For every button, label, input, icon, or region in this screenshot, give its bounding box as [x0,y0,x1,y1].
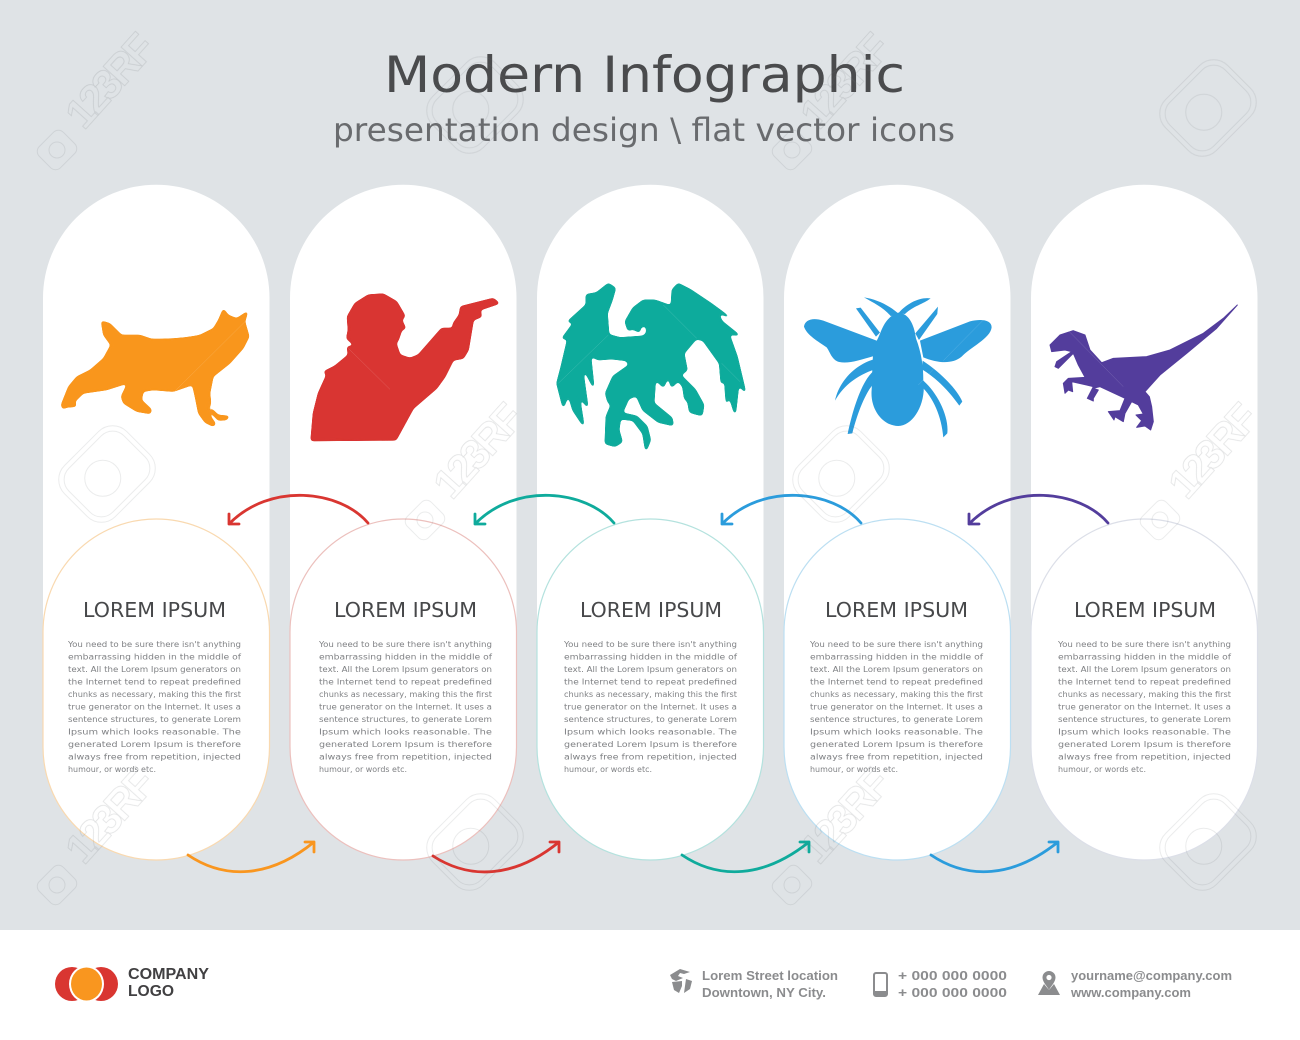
icon: map pin [1038,971,1060,995]
body text: humour, or words etc. [68,765,156,774]
body text: generated Lorem Ipsum is therefore [564,740,737,749]
heading: LOREM IPSUM [1074,598,1216,622]
body text: the Internet tend to repeat predefined [319,678,492,686]
body text: true generator on the Internet. It uses a [68,702,241,712]
body text: text. All the Lorem Ipsum generators on [319,665,492,674]
title: Modern Infographic [384,46,905,104]
body text: true generator on the Internet. It uses a [1058,702,1231,712]
body text: embarrassing hidden in the middle of [564,652,737,662]
contact: address: Downtown, NY City. [702,985,826,1000]
body text: chunks as necessary, making this the first [810,690,983,699]
arrow: blue top [722,495,861,524]
body text: You need to be sure there isn't anything [1057,640,1231,649]
icon: griffin [557,284,745,450]
contact: address [670,968,838,1000]
body text: humour, or words etc. [319,765,407,774]
icon: raptor [1050,305,1237,430]
body text: true generator on the Internet. It uses a [564,702,737,712]
body text: embarrassing hidden in the middle of [1058,652,1231,662]
icon: lynx [61,308,249,427]
contact: web [1038,968,1232,1000]
body text: the Internet tend to repeat predefined [68,678,241,686]
icon: logo circles [55,966,118,1002]
body text: sentence structures, to generate Lorem [564,715,737,724]
panel: blue bee [784,185,1010,860]
body text: You need to be sure there isn't anything [318,640,492,649]
watermark labels: 123RF [56,24,164,137]
logo text: COMPANY [128,966,209,983]
arrow: teal bottom [682,842,809,872]
body text: text. All the Lorem Ipsum generators on [564,665,737,674]
panel: orange lynx [43,185,270,860]
heading: LOREM IPSUM [334,598,477,622]
body text [1057,640,1231,774]
body text: generated Lorem Ipsum is therefore [68,740,241,749]
watermark labels: 123RF [791,24,899,137]
body text [563,640,737,774]
watermark labels: 123RF [1159,394,1267,507]
body text: chunks as necessary, making this the first [319,690,492,699]
body text: the Internet tend to repeat predefined [564,678,737,686]
body text: embarrassing hidden in the middle of [319,652,492,662]
arrow: blue bottom [931,842,1058,872]
company logo [55,966,209,1002]
body text: embarrassing hidden in the middle of [68,652,241,662]
body text: the Internet tend to repeat predefined [1058,678,1231,686]
card: blue [784,519,1010,860]
subtitle: presentation design \ flat vector icons [333,111,955,149]
body text: Ipsum which looks reasonable. The [319,728,492,736]
body text: always free from repetition, injected [1058,752,1231,762]
panel: red gunman [290,185,516,860]
heading: LOREM IPSUM [83,598,226,622]
body text: humour, or words etc. [1058,765,1146,774]
body text: true generator on the Internet. It uses a [810,702,983,712]
body text: true generator on the Internet. It uses a [319,702,492,712]
body text: embarrassing hidden in the middle of [810,652,983,662]
body text: You need to be sure there isn't anything [809,640,983,649]
heading: LOREM IPSUM [825,598,968,622]
contact: phone [874,968,1007,1000]
body text: generated Lorem Ipsum is therefore [1058,740,1231,749]
body text: text. All the Lorem Ipsum generators on [68,665,241,674]
body text: sentence structures, to generate Lorem [68,715,241,724]
body text: chunks as necessary, making this the first [1058,690,1231,699]
watermark labels [56,24,1267,872]
contact: address: Lorem Street location [702,968,838,983]
card: purple [1031,519,1258,860]
body text [809,640,983,774]
watermark labels: 123RF [791,759,899,872]
body text: always free from repetition, injected [564,752,737,762]
body text: humour, or words etc. [810,765,898,774]
body text: chunks as necessary, making this the first [564,690,737,699]
body text [67,640,241,774]
body text: the Internet tend to repeat predefined [810,678,983,686]
body text: generated Lorem Ipsum is therefore [810,740,983,749]
panel: purple raptor [1031,185,1258,860]
watermark labels: 123RF [56,759,164,872]
footer band [0,930,1300,1040]
icon: bee [804,297,992,437]
arrow: teal top [475,495,614,524]
body text: sentence structures, to generate Lorem [319,715,492,724]
body text: always free from repetition, injected [68,752,241,762]
arrow: red bottom [433,842,559,872]
company logo: LOGO [128,983,174,1000]
card: orange [43,519,270,860]
body text: You need to be sure there isn't anything [67,640,241,649]
watermark labels: 123RF [424,394,532,507]
arrow: red top [229,495,368,524]
body text: generated Lorem Ipsum is therefore [319,740,492,749]
heading: LOREM IPSUM [580,598,722,622]
contact: phone: + 000 000 0000 [898,968,1007,983]
card: red [290,519,516,860]
icon: phone [874,973,887,996]
body text: You need to be sure there isn't anything [563,640,737,649]
body text: text. All the Lorem Ipsum generators on [810,665,983,674]
contact: web: www.company.com [1070,985,1191,1000]
icon: gunman [311,294,499,441]
arrow: purple top [969,495,1108,524]
arrow: orange bottom [188,842,314,872]
body text: Ipsum which looks reasonable. The [564,728,737,736]
body text: sentence structures, to generate Lorem [810,715,983,724]
body text: humour, or words etc. [564,765,652,774]
panel: teal griffin [537,185,764,860]
body text: Ipsum which looks reasonable. The [68,728,241,736]
body text: text. All the Lorem Ipsum generators on [1058,665,1231,674]
contact: phone: + 000 000 0000 [898,985,1007,1000]
body text: Ipsum which looks reasonable. The [810,728,983,736]
body text: always free from repetition, injected [810,752,983,762]
body text [318,640,492,774]
icon: globe [670,969,692,993]
body text: always free from repetition, injected [319,752,492,762]
body text: chunks as necessary, making this the first [68,690,241,699]
body text: sentence structures, to generate Lorem [1058,715,1231,724]
body text: Ipsum which looks reasonable. The [1058,728,1231,736]
watermark stamps [34,48,1265,908]
contact: web: yourname@company.com [1071,968,1232,983]
card: teal [537,519,764,860]
